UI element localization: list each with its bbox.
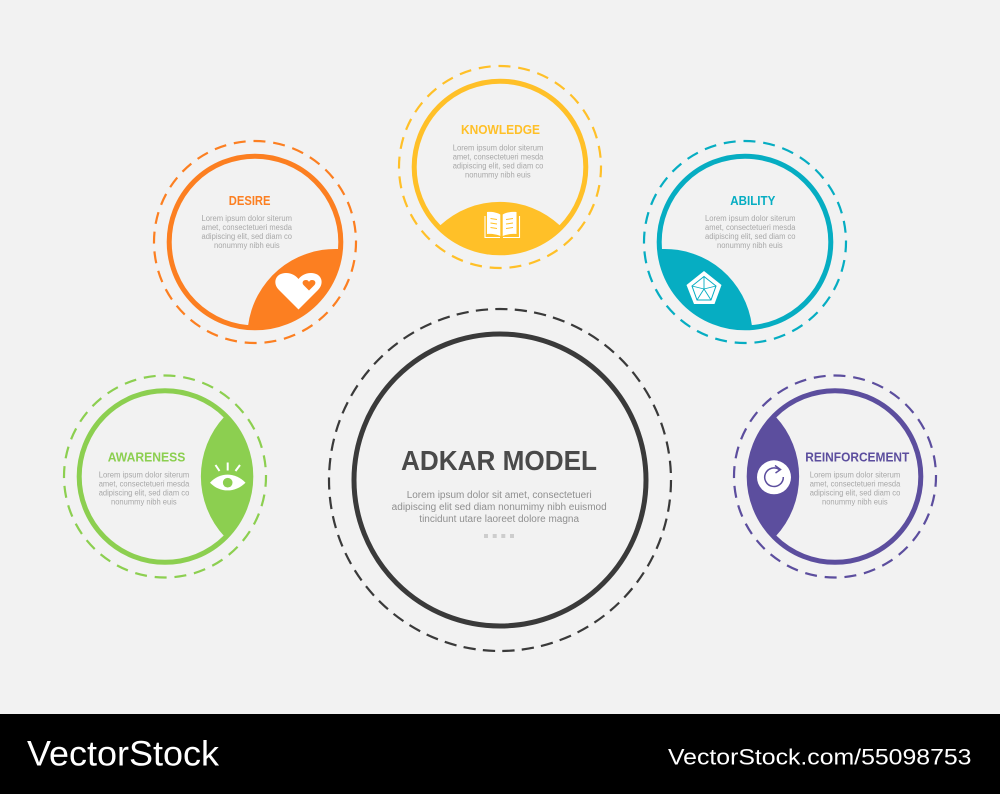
- pagination dots: [484, 534, 514, 538]
- panel: center ADKAR model: [329, 309, 671, 651]
- text: knowledge description: nonummy nibh euis: [465, 170, 531, 179]
- text: reinforcement description: adipiscing elit, sed diam co: [810, 488, 901, 498]
- center description: [392, 490, 607, 525]
- text: desire description: nonummy nibh euis: [214, 241, 280, 250]
- text: ability description: nonummy nibh euis: [717, 241, 783, 250]
- heading: awareness: AWARENESS: [108, 450, 185, 464]
- text: ability description: Lorem ipsum dolor siterum: [705, 214, 796, 223]
- panel: reinforcement: [734, 376, 936, 578]
- text: awareness description: amet, consectetueri mesda: [99, 480, 190, 488]
- text: ability description: adipiscing elit, sed diam co: [705, 232, 796, 241]
- heading: ability: ABILITY: [730, 194, 776, 208]
- panel: knowledge: [399, 66, 601, 268]
- icon: eye: [210, 462, 246, 490]
- title: ADKAR MODEL: [401, 445, 597, 476]
- panel: ability: [644, 141, 846, 343]
- heading: knowledge: KNOWLEDGE: [461, 123, 540, 137]
- text: reinforcement description: nonummy nibh euis: [822, 498, 888, 506]
- text: awareness description: nonummy nibh euis: [111, 498, 177, 506]
- panel: desire: [154, 141, 356, 343]
- center description: tincidunt utare laoreet dolore magna: [419, 514, 579, 525]
- text: reinforcement description: Lorem ipsum dolor siterum: [810, 470, 901, 480]
- text: desire description: adipiscing elit, sed diam co: [202, 232, 293, 241]
- text: awareness description: [99, 470, 190, 506]
- icon: refresh: [757, 460, 791, 494]
- text: desire description: amet, consectetueri mesda: [202, 223, 293, 232]
- text: ability description: [705, 214, 796, 250]
- icon: radar pentagon: [686, 271, 722, 304]
- watermark url: VectorStock.com/55098753: [668, 744, 972, 769]
- text: desire description: Lorem ipsum dolor siterum: [202, 214, 292, 223]
- center description: Lorem ipsum dolor sit amet, consectetueri: [407, 490, 592, 501]
- text: desire description: [202, 214, 293, 250]
- text: knowledge description: adipiscing elit, sed diam co: [453, 161, 544, 170]
- text: knowledge description: [453, 143, 544, 179]
- heading: reinforcement: REINFORCEMENT: [805, 450, 910, 464]
- footer bar: [0, 714, 1000, 794]
- text: knowledge description: amet, consectetueri mesda: [453, 152, 544, 161]
- text: reinforcement description: amet, consectetueri mesda: [810, 480, 901, 488]
- text: awareness description: Lorem ipsum dolor siterum: [99, 470, 190, 480]
- panel: awareness: [64, 376, 266, 578]
- icon: open book: [485, 212, 520, 238]
- heading: desire: DESIRE: [229, 194, 270, 208]
- text: knowledge description: Lorem ipsum dolor siterum: [453, 143, 544, 152]
- icon: heart: [275, 273, 322, 310]
- center description: adipiscing elit sed diam nonumimy nibh euismod: [392, 502, 607, 513]
- text: ability description: amet, consectetueri mesda: [705, 223, 796, 232]
- text: reinforcement description: [810, 470, 901, 506]
- watermark logo: VectorStock: [27, 734, 219, 774]
- text: awareness description: adipiscing elit, sed diam co: [99, 488, 190, 498]
